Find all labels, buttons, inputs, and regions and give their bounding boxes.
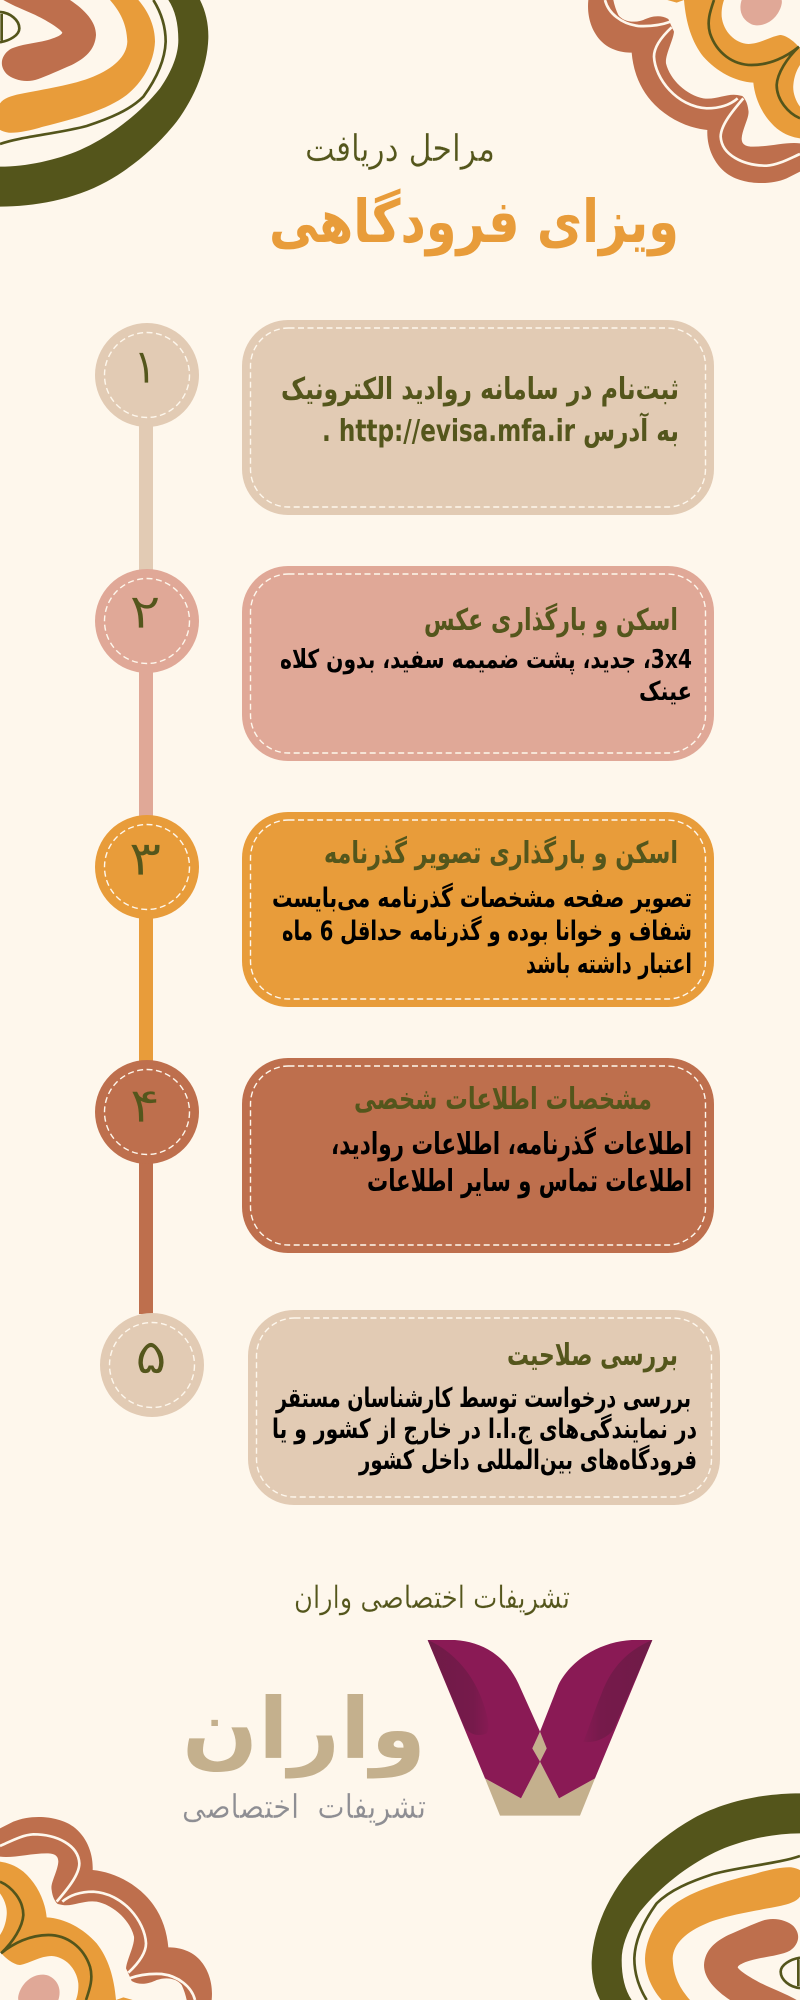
step 2 number	[95, 569, 199, 673]
panel: step 3	[242, 812, 714, 1007]
timeline connector lines	[139, 420, 153, 1314]
logo: wordmark: واران	[182, 1680, 426, 1779]
footer caption: تشریفات اختصاصی واران	[294, 1580, 570, 1616]
logo: V crown mark	[428, 1640, 652, 1816]
panel: step 1	[242, 320, 714, 515]
panel: step 3: اعتبار داشته باشد	[526, 949, 692, 980]
logo: wordmark: تشریفات اختصاصی	[182, 1787, 426, 1826]
panel: step 1: به آدرس http://evisa.mfa.ir .	[322, 412, 679, 449]
heading: main title: ویزای فرودگاهی	[269, 187, 679, 257]
step 3 number	[95, 815, 199, 919]
decoration: bottom-right arcs	[592, 1793, 800, 2000]
panel: step 4: مشخصات اطلاعات شخصی	[354, 1082, 652, 1117]
step 4 number	[95, 1060, 199, 1164]
step 3 number: ۳	[128, 831, 162, 887]
step 1 number: ۱	[132, 339, 158, 395]
panel: step 3: اسکن و بارگذاری تصویر گذرنامه	[324, 835, 678, 871]
panel: step 2	[242, 566, 714, 761]
step 2 number: ۲	[129, 584, 161, 639]
panel: step 5	[248, 1310, 720, 1505]
panel: step 1: ثبت‌نام در سامانه روادید الکترونیک	[281, 372, 679, 407]
decoration: bottom-left petals	[0, 1817, 212, 2000]
panel: step 2: اسکن و بارگذاری عکس	[424, 602, 678, 638]
step 5 number: ۵	[135, 1329, 167, 1384]
panel: step 5: بررسی صلاحیت	[507, 1338, 678, 1373]
decoration: top-right petals	[588, 0, 800, 183]
panel: step 2: عینک	[639, 677, 692, 707]
heading: subtitle: مراحل دریافت	[305, 127, 495, 170]
panel: step 4	[242, 1058, 714, 1253]
logo: wordmark	[182, 1680, 426, 1826]
step 5 number	[100, 1313, 204, 1417]
panel: step 2: 3x4، جدید، پشت ضمیمه سفید، بدون کلاه	[280, 645, 692, 675]
step 4 number: ۴	[130, 1078, 160, 1134]
step 1 number	[95, 323, 199, 427]
decoration: top-left arcs	[0, 0, 208, 207]
